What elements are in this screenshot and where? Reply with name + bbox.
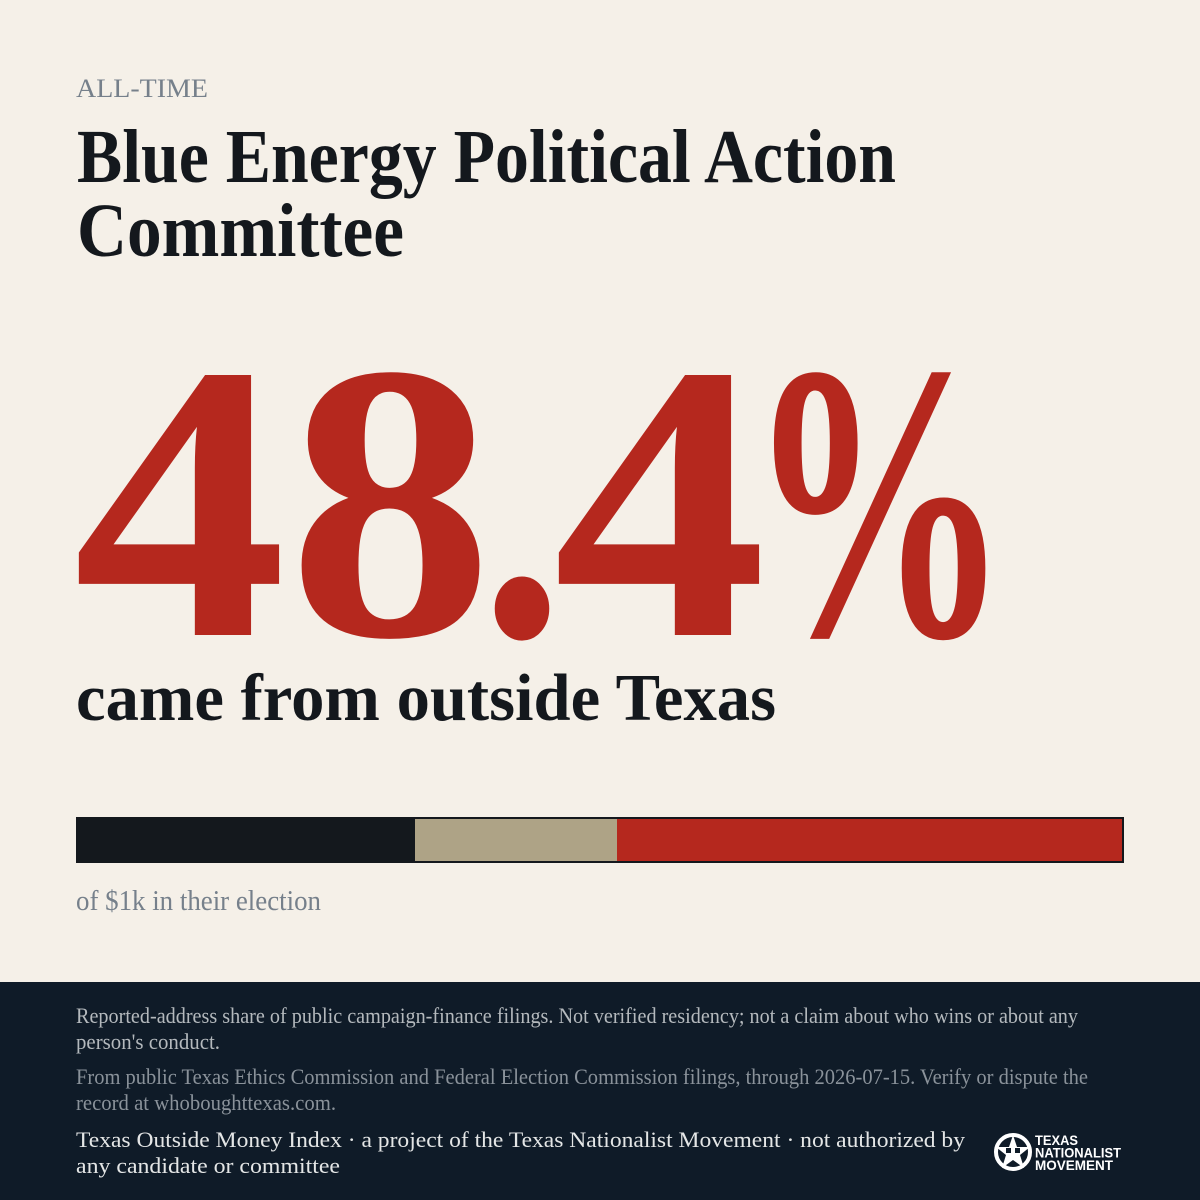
big percentage (73, 284, 1010, 721)
big percentage: 4 (553, 284, 767, 721)
bar segment: red (617, 819, 1122, 861)
source text: record at whoboughttexas.com. (76, 1090, 336, 1115)
stacked bar (76, 817, 1124, 863)
source text: From public Texas Ethics Commission and Federal Election Commission filings, through 2026-07-15. Verify or dispute the (76, 1064, 1088, 1089)
disclaimer text: Reported-address share of public campaign-finance filings. Not verified residency; not a claim about who wins or about any (76, 1003, 1078, 1028)
disclaimer text (76, 1003, 1078, 1054)
bar caption: of $1k in their election (76, 885, 321, 917)
footer panel (0, 982, 1200, 1200)
subheading: came from outside Texas (76, 661, 776, 735)
eyebrow: time period: ALL-TIME (76, 74, 208, 103)
logo wordmark (1035, 1132, 1121, 1173)
logo wordmark: MOVEMENT (1035, 1157, 1113, 1173)
big percentage: . (480, 284, 564, 721)
attribution text: any candidate or committee (76, 1153, 340, 1178)
icon: star in ring (996, 1135, 1030, 1169)
disclaimer text: person's conduct. (76, 1029, 220, 1054)
logo wordmark: NATIONALIST (1035, 1144, 1121, 1160)
source text (76, 1064, 1088, 1115)
big percentage: % (747, 284, 1010, 721)
title: Committee (77, 189, 404, 273)
big percentage: 8 (288, 284, 493, 721)
logo wordmark: TEXAS (1035, 1132, 1078, 1148)
title: Blue Energy Political Action (77, 115, 896, 199)
logo: Texas Nationalist Movement (996, 1132, 1121, 1173)
big percentage: 4 (73, 284, 287, 721)
attribution text: Texas Outside Money Index · a project of the Texas Nationalist Movement · not authorized by (76, 1127, 965, 1152)
bar segment: tan (415, 819, 617, 861)
title (77, 115, 896, 273)
attribution text (76, 1127, 965, 1178)
